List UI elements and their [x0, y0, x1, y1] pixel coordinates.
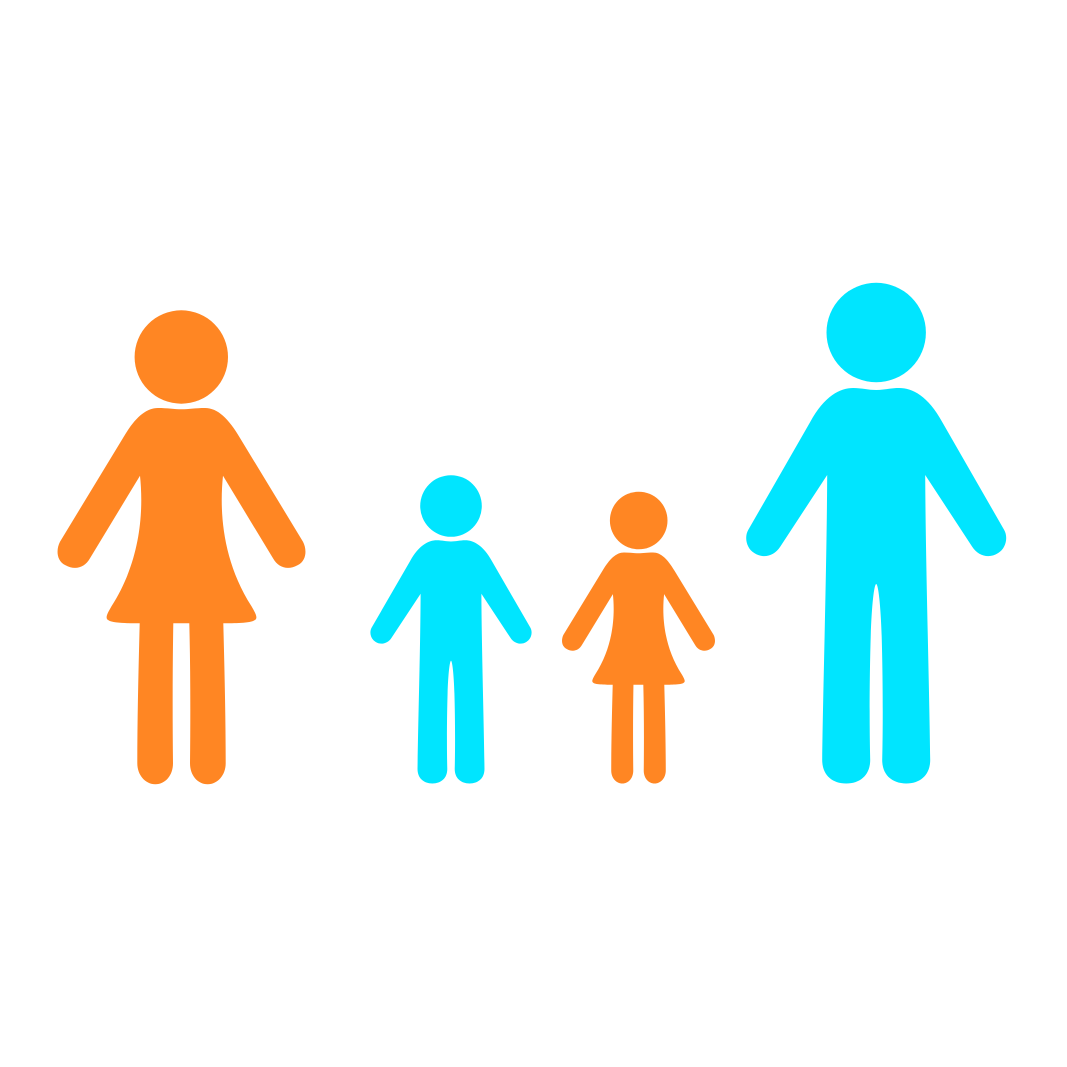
icon: adult man figure — [746, 283, 1006, 784]
icon: adult woman figure — [58, 310, 305, 784]
icon: girl figure — [562, 492, 715, 784]
icon: boy figure — [370, 475, 532, 784]
